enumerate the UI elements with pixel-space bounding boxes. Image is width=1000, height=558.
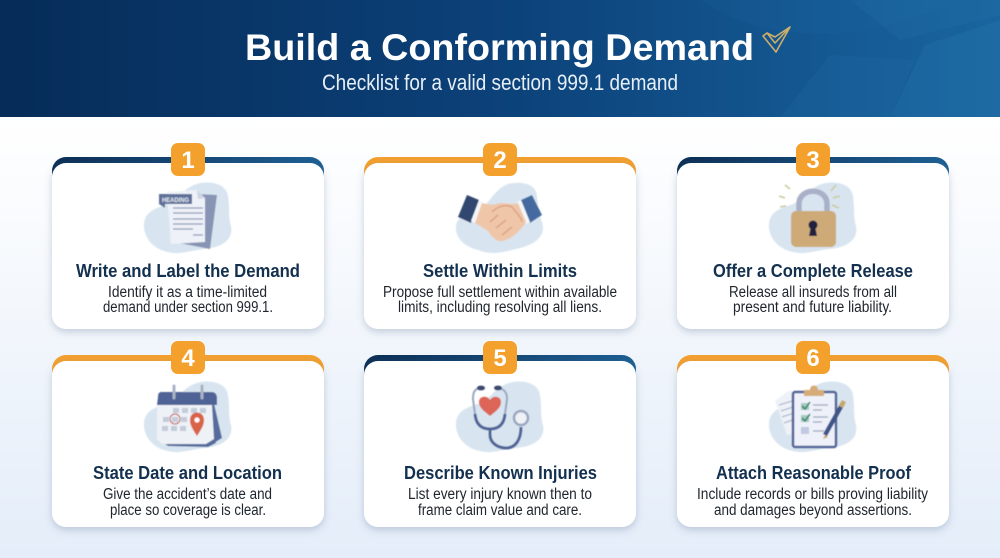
step number badge 1: 1: [181, 147, 195, 174]
step number badge 5: [483, 341, 517, 374]
icon: calendar with location pin: [144, 382, 231, 452]
icon: gold checkmark: [763, 27, 790, 52]
step number badge 4: [171, 341, 205, 374]
step number badge 2: 2: [493, 147, 507, 174]
card body text: Release all insureds from all: [729, 284, 897, 301]
card heading: Offer a Complete Release: [713, 260, 913, 281]
step number badge 3: 3: [806, 147, 820, 174]
card body text: [408, 486, 592, 519]
card body text: Include records or bills proving liability: [697, 486, 928, 503]
card body text: [103, 284, 273, 316]
card body text: frame claim value and care.: [418, 502, 582, 519]
panel: step 1: [52, 143, 324, 329]
title: Build a Conforming Demand: [245, 27, 754, 68]
icon: document with heading: [144, 183, 231, 253]
card body text: place so coverage is clear.: [110, 502, 266, 519]
panel: step 3: [677, 143, 949, 329]
card body text: Give the accident’s date and: [103, 486, 272, 503]
step number badge 4: 4: [181, 345, 195, 372]
panel: step 2: [364, 143, 636, 329]
panel: step 5: [364, 341, 636, 527]
card body text: Identify it as a time-limited: [108, 284, 267, 301]
step number badge 6: [796, 341, 830, 374]
card body text: limits, including resolving all liens.: [398, 299, 602, 316]
card heading: Attach Reasonable Proof: [716, 462, 912, 483]
card heading: Describe Known Injuries: [404, 462, 597, 483]
panel: step 4: [52, 341, 324, 527]
card body text: List every injury known then to: [408, 486, 592, 503]
card heading: Write and Label the Demand: [76, 260, 300, 281]
card body text: [697, 486, 928, 519]
card body text: demand under section 999.1.: [103, 299, 273, 316]
card body text: and damages beyond assertions.: [714, 502, 912, 519]
card body text: [383, 284, 617, 316]
card body text: present and future liability.: [733, 299, 892, 316]
card heading: State Date and Location: [93, 462, 282, 483]
step number badge 5: 5: [493, 345, 507, 372]
step number badge 1: [171, 143, 205, 176]
card body text: Propose full settlement within available: [383, 284, 617, 301]
icon: clipboard checklist with pen: [769, 382, 856, 452]
subtitle: Checklist for a valid section 999.1 demand: [322, 70, 678, 95]
panel: step 6: [677, 341, 949, 527]
card body text: [729, 284, 897, 316]
icon: padlock: [769, 183, 856, 253]
page background: [0, 117, 1000, 558]
step number badge 2: [483, 143, 517, 176]
icon: stethoscope with heart: [456, 382, 543, 452]
step number badge 3: [796, 143, 830, 176]
step number badge 6: 6: [806, 345, 820, 372]
card body text: [103, 486, 272, 519]
card heading: Settle Within Limits: [423, 260, 577, 281]
icon: document with heading: HEADING: [162, 197, 189, 204]
icon: handshake: [456, 183, 543, 253]
header banner: [0, 0, 1000, 117]
